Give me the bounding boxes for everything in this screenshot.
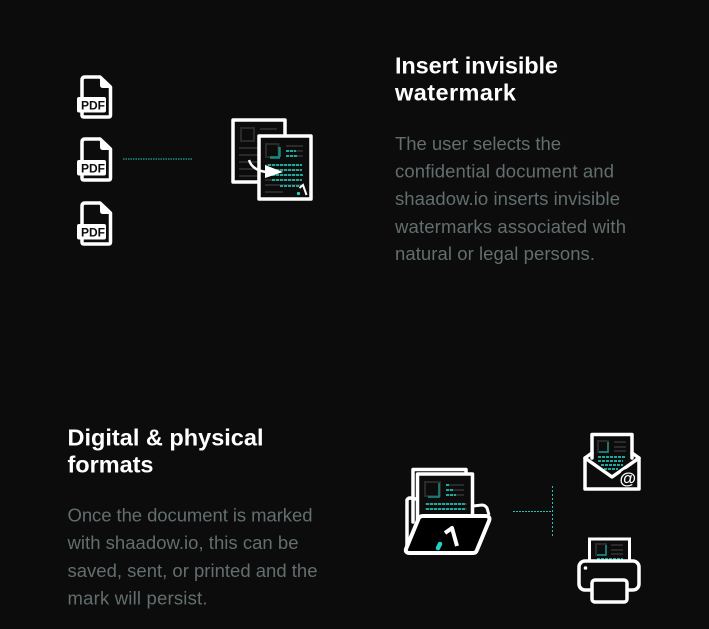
text block: insert description <box>394 133 626 264</box>
icon: PDF file 2 <box>77 139 111 180</box>
heading: digital and physical formats: formats <box>68 452 154 478</box>
text block: formats description: Once the document is marked <box>68 505 312 526</box>
text block: insert description: confidential document and <box>395 160 614 182</box>
icon: watermarked document pair <box>233 120 311 199</box>
icon: PDF file 2: PDF <box>81 162 105 176</box>
heading: insert invisible watermark: watermark <box>394 80 517 106</box>
text block: formats description: saved, sent, or printed and the <box>68 560 318 581</box>
icon: email envelope with document <box>585 434 639 489</box>
connector: PDF files to document <box>123 158 192 160</box>
text block: formats description <box>66 505 318 608</box>
icon: PDF file 1 <box>77 77 111 117</box>
icon: printer with document <box>579 539 639 602</box>
icon: folder with documents <box>406 470 490 553</box>
text block: insert description: watermarks associated with <box>394 216 626 237</box>
heading: insert invisible watermark <box>394 52 558 106</box>
text block: formats description: with shaadow.io, this can be <box>66 532 298 553</box>
icon: PDF file 3 <box>77 203 111 244</box>
icon: email envelope with document: @ <box>620 469 636 488</box>
icon: PDF file 1: PDF <box>81 98 105 112</box>
icon: PDF file 3: PDF <box>81 226 105 240</box>
heading: digital and physical formats: Digital & physical <box>68 425 264 451</box>
text block: insert description: The user selects the <box>395 133 561 154</box>
heading: digital and physical formats <box>68 425 264 478</box>
heading: insert invisible watermark: Insert invisible <box>395 52 558 78</box>
text block: insert description: shaadow.io inserts invisible <box>395 188 620 209</box>
connector: folder to email and printer <box>513 486 552 537</box>
text block: formats description: mark will persist. <box>68 588 208 608</box>
text block: insert description: natural or legal persons. <box>395 243 595 264</box>
